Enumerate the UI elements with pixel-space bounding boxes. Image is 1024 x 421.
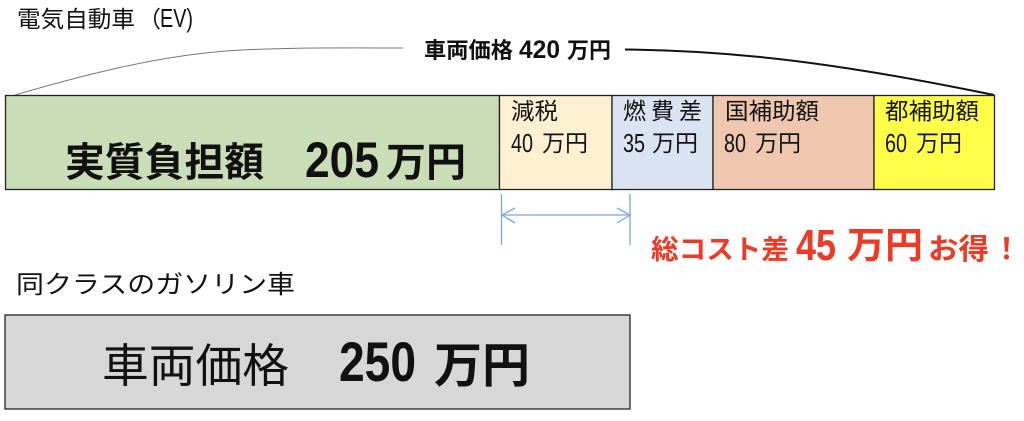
- segment: Tokyo subsidy: 60: [885, 128, 907, 158]
- segment: national subsidy: 国補助額: [725, 98, 819, 124]
- callout: total cost difference: 万円: [847, 225, 923, 266]
- label: vehicle price 420: 車両価格: [424, 38, 513, 63]
- heading: electric vehicle: EV): [160, 3, 193, 33]
- heading: electric vehicle: [17, 3, 193, 33]
- panel: gasoline car price: 車両価格: [102, 340, 289, 392]
- segment: effective cost: 実質負担額: [65, 141, 264, 185]
- callout: total cost difference: [651, 221, 1021, 270]
- segment: effective cost: 万円: [386, 141, 466, 185]
- segment: Tokyo subsidy: 都補助額: [885, 98, 979, 124]
- callout: total cost difference: 総コスト差: [651, 235, 789, 265]
- panel: gasoline car price: 万円: [434, 340, 530, 393]
- stacked bar: EV price breakdown: [6, 96, 994, 190]
- segment: tax reduction: 万円: [542, 130, 588, 156]
- callout: total cost difference: お得: [928, 233, 989, 266]
- segment: national subsidy: 80: [724, 128, 746, 158]
- segment: Tokyo subsidy: 万円: [916, 130, 962, 156]
- segment: tax reduction: 40: [511, 128, 533, 158]
- heading: electric vehicle: （: [138, 6, 161, 32]
- segment: Tokyo subsidy: [874, 96, 994, 190]
- segment: fuel cost difference: [612, 96, 713, 190]
- segment: tax reduction: 減税: [511, 98, 558, 124]
- heading: electric vehicle: 電気自動車: [17, 6, 135, 32]
- arrow: cost difference span: [502, 194, 630, 245]
- segment: fuel cost difference: 万円: [652, 130, 698, 156]
- callout: total cost difference: ！: [992, 234, 1021, 266]
- segment: fuel cost difference: 費: [651, 98, 674, 124]
- label: vehicle price 420: 万円: [567, 38, 611, 63]
- panel: gasoline car price: [5, 315, 630, 409]
- callout: total cost difference: 45: [796, 221, 836, 270]
- panel: gasoline car price: 250: [339, 330, 416, 393]
- curved bracket: vehicle price span: [15, 48, 994, 95]
- heading: comparable gasoline car: 同クラスのガソリン車: [16, 271, 295, 299]
- label: vehicle price 420: [424, 36, 611, 64]
- segment: fuel cost difference: 差: [679, 98, 702, 124]
- label: vehicle price 420: 420: [519, 36, 560, 64]
- segment: effective cost: 205: [305, 132, 379, 188]
- segment: national subsidy: 万円: [755, 130, 801, 156]
- segment: national subsidy: [713, 96, 874, 190]
- segment: effective cost: [6, 96, 500, 190]
- segment: fuel cost difference: 燃: [623, 98, 646, 124]
- segment: fuel cost difference: 35: [623, 128, 645, 158]
- segment: tax reduction: [500, 96, 612, 190]
